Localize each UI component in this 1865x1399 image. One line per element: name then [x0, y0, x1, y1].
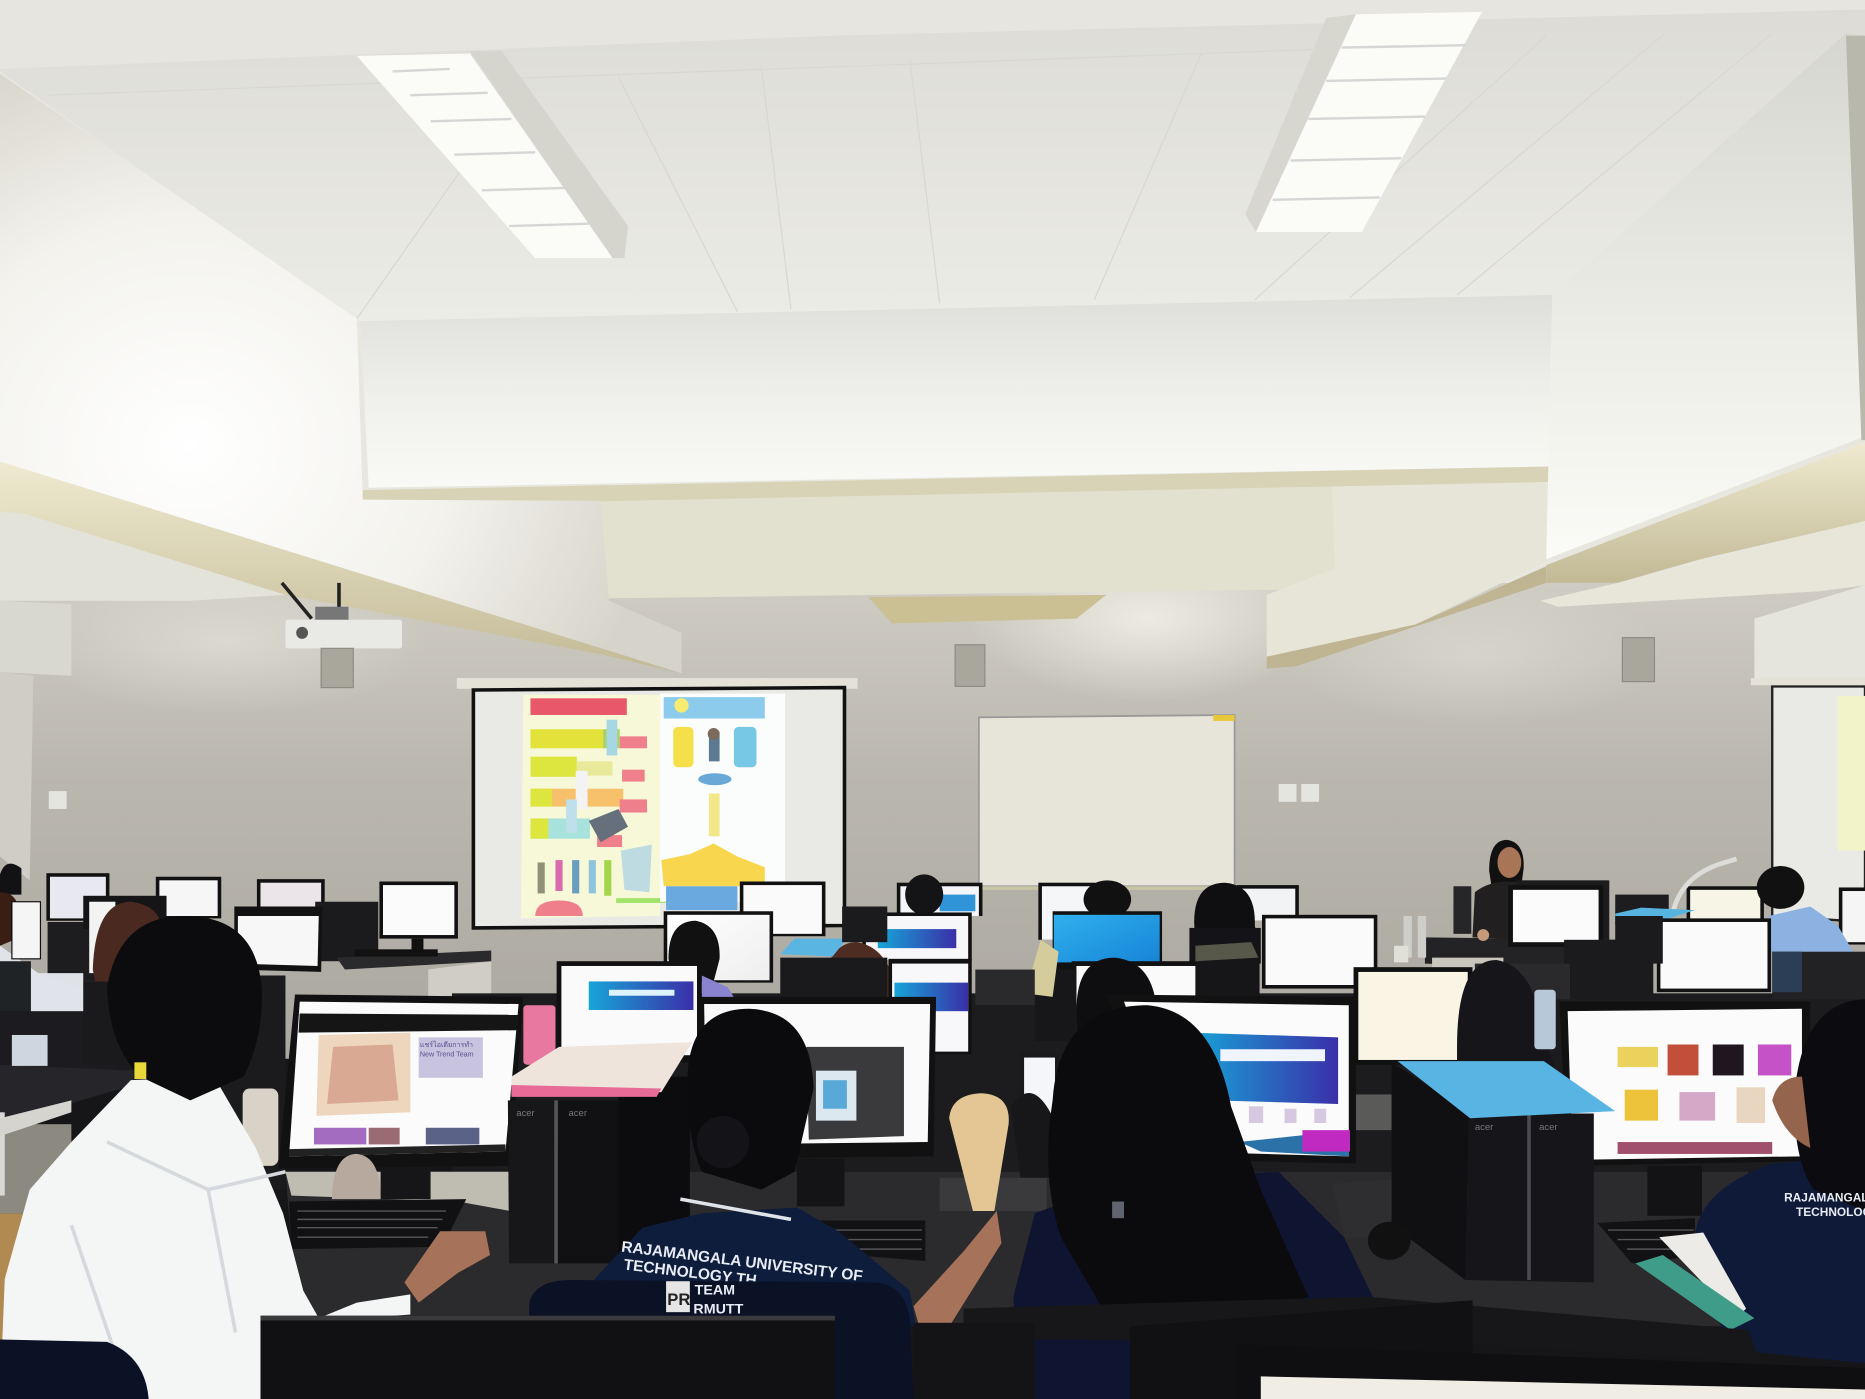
drink cup in plastic bag [949, 1093, 1009, 1211]
air conditioner vent [868, 595, 1106, 623]
far row monitors [46, 873, 1865, 953]
shirt [0, 1077, 410, 1399]
PR team badge: RMUTT [693, 1301, 744, 1317]
desktop PC towers centre: acer [569, 1108, 587, 1119]
woman long hair centre back [1076, 958, 1156, 1035]
person two navy polo: TECHNOLOGY TH [623, 1256, 757, 1290]
mouse [1368, 1222, 1411, 1260]
PR team badge: TEAM [695, 1282, 735, 1298]
projected infographic right page [660, 694, 785, 910]
person three long hair [1013, 1005, 1377, 1399]
projector screen housing [457, 678, 858, 689]
woman with ponytail left [0, 864, 161, 1340]
right projection screen [1751, 678, 1865, 922]
far left desks and dark PCs [48, 896, 491, 997]
water bottle and pink bottle [243, 1005, 555, 1166]
arm and hand [404, 1231, 490, 1303]
right beam face [1546, 33, 1865, 559]
chair back person two [529, 1280, 913, 1399]
front monitor 2 [698, 997, 936, 1206]
dark desk surface of front row [285, 1172, 1748, 1326]
third row monitors [557, 959, 1472, 1065]
center beam [360, 295, 1556, 488]
pink document folder [511, 1042, 692, 1097]
desktop PC towers right: acer [1539, 1122, 1558, 1133]
person right navy shirt [1695, 999, 1865, 1363]
desktop PC towers right: acer [1475, 1122, 1493, 1133]
light desk surface [285, 1094, 1415, 1237]
wall switches [49, 784, 1319, 809]
monitor base card [332, 1154, 381, 1199]
left dark desk area [119, 975, 285, 1190]
front monitor 1 with blog page: แชร์ไอเดียการทำ [420, 1040, 473, 1049]
front monitor 1 with blog page [278, 995, 523, 1199]
rear beam [601, 482, 1344, 598]
front desk black edge [963, 1297, 1760, 1362]
foreground monitor back [260, 1316, 835, 1399]
desktop PC towers right [1392, 1062, 1594, 1282]
presenter monitor [1453, 880, 1609, 947]
foreground monitor right with screen [1237, 1344, 1865, 1399]
right beam underside [1546, 443, 1865, 583]
rear right beam underside [1267, 566, 1546, 669]
man in blue shirt [1615, 866, 1853, 952]
foreground chair right [1130, 1300, 1472, 1399]
background heads [905, 874, 1261, 964]
ceiling [0, 0, 1865, 321]
woman at second row [668, 906, 898, 1002]
rear right beam face [1267, 476, 1546, 657]
presenter desk [1394, 916, 1618, 993]
left beam face [0, 74, 682, 673]
person one with white shirt [0, 916, 490, 1399]
dark backdrop of back-row desks [452, 993, 1865, 1172]
second row monitors [234, 906, 1771, 992]
keyboards [289, 1199, 1695, 1263]
left lower wall panel [0, 512, 285, 601]
ceiling light right [1245, 12, 1482, 232]
projection screen [473, 688, 844, 928]
presenter woman [1472, 840, 1528, 941]
front monitor 4 with template gallery [1559, 1002, 1810, 1216]
wall speakers [321, 638, 1654, 688]
PR team badge [666, 1281, 744, 1317]
room background wall [0, 583, 1865, 1059]
desk leg [913, 1323, 1035, 1399]
PR team badge: PR [667, 1290, 690, 1309]
person two navy polo: RAJAMANGALA UNIVERSITY OF [620, 1239, 864, 1285]
right wall panel [1754, 585, 1865, 684]
person two navy polo [595, 1009, 1001, 1326]
foreground chair left [0, 1340, 149, 1399]
center beam underside [363, 466, 1558, 506]
document camera [1674, 859, 1737, 910]
blue plastic folder [1398, 1061, 1615, 1118]
left beam underside [0, 462, 682, 673]
wall glow [24, 535, 1665, 726]
back-row desk PCs [975, 916, 1865, 1041]
desktop PC towers centre [508, 1077, 690, 1263]
hair [107, 916, 262, 1100]
whiteboard [979, 715, 1235, 890]
woman long hair right back [1457, 960, 1558, 1077]
tablet [1021, 1053, 1059, 1122]
front monitor 1 with blog page: New Trend Team [420, 1050, 474, 1058]
front monitor 3 [1106, 995, 1356, 1163]
ceiling light left [357, 51, 628, 258]
person with tablet [1011, 1093, 1059, 1178]
paper sheet and green ruler [1635, 1232, 1754, 1330]
projector mount and projector [282, 583, 402, 648]
projected infographic left page [521, 695, 673, 918]
desktop PC towers centre: acer [516, 1108, 535, 1119]
upper room base [0, 0, 1865, 595]
